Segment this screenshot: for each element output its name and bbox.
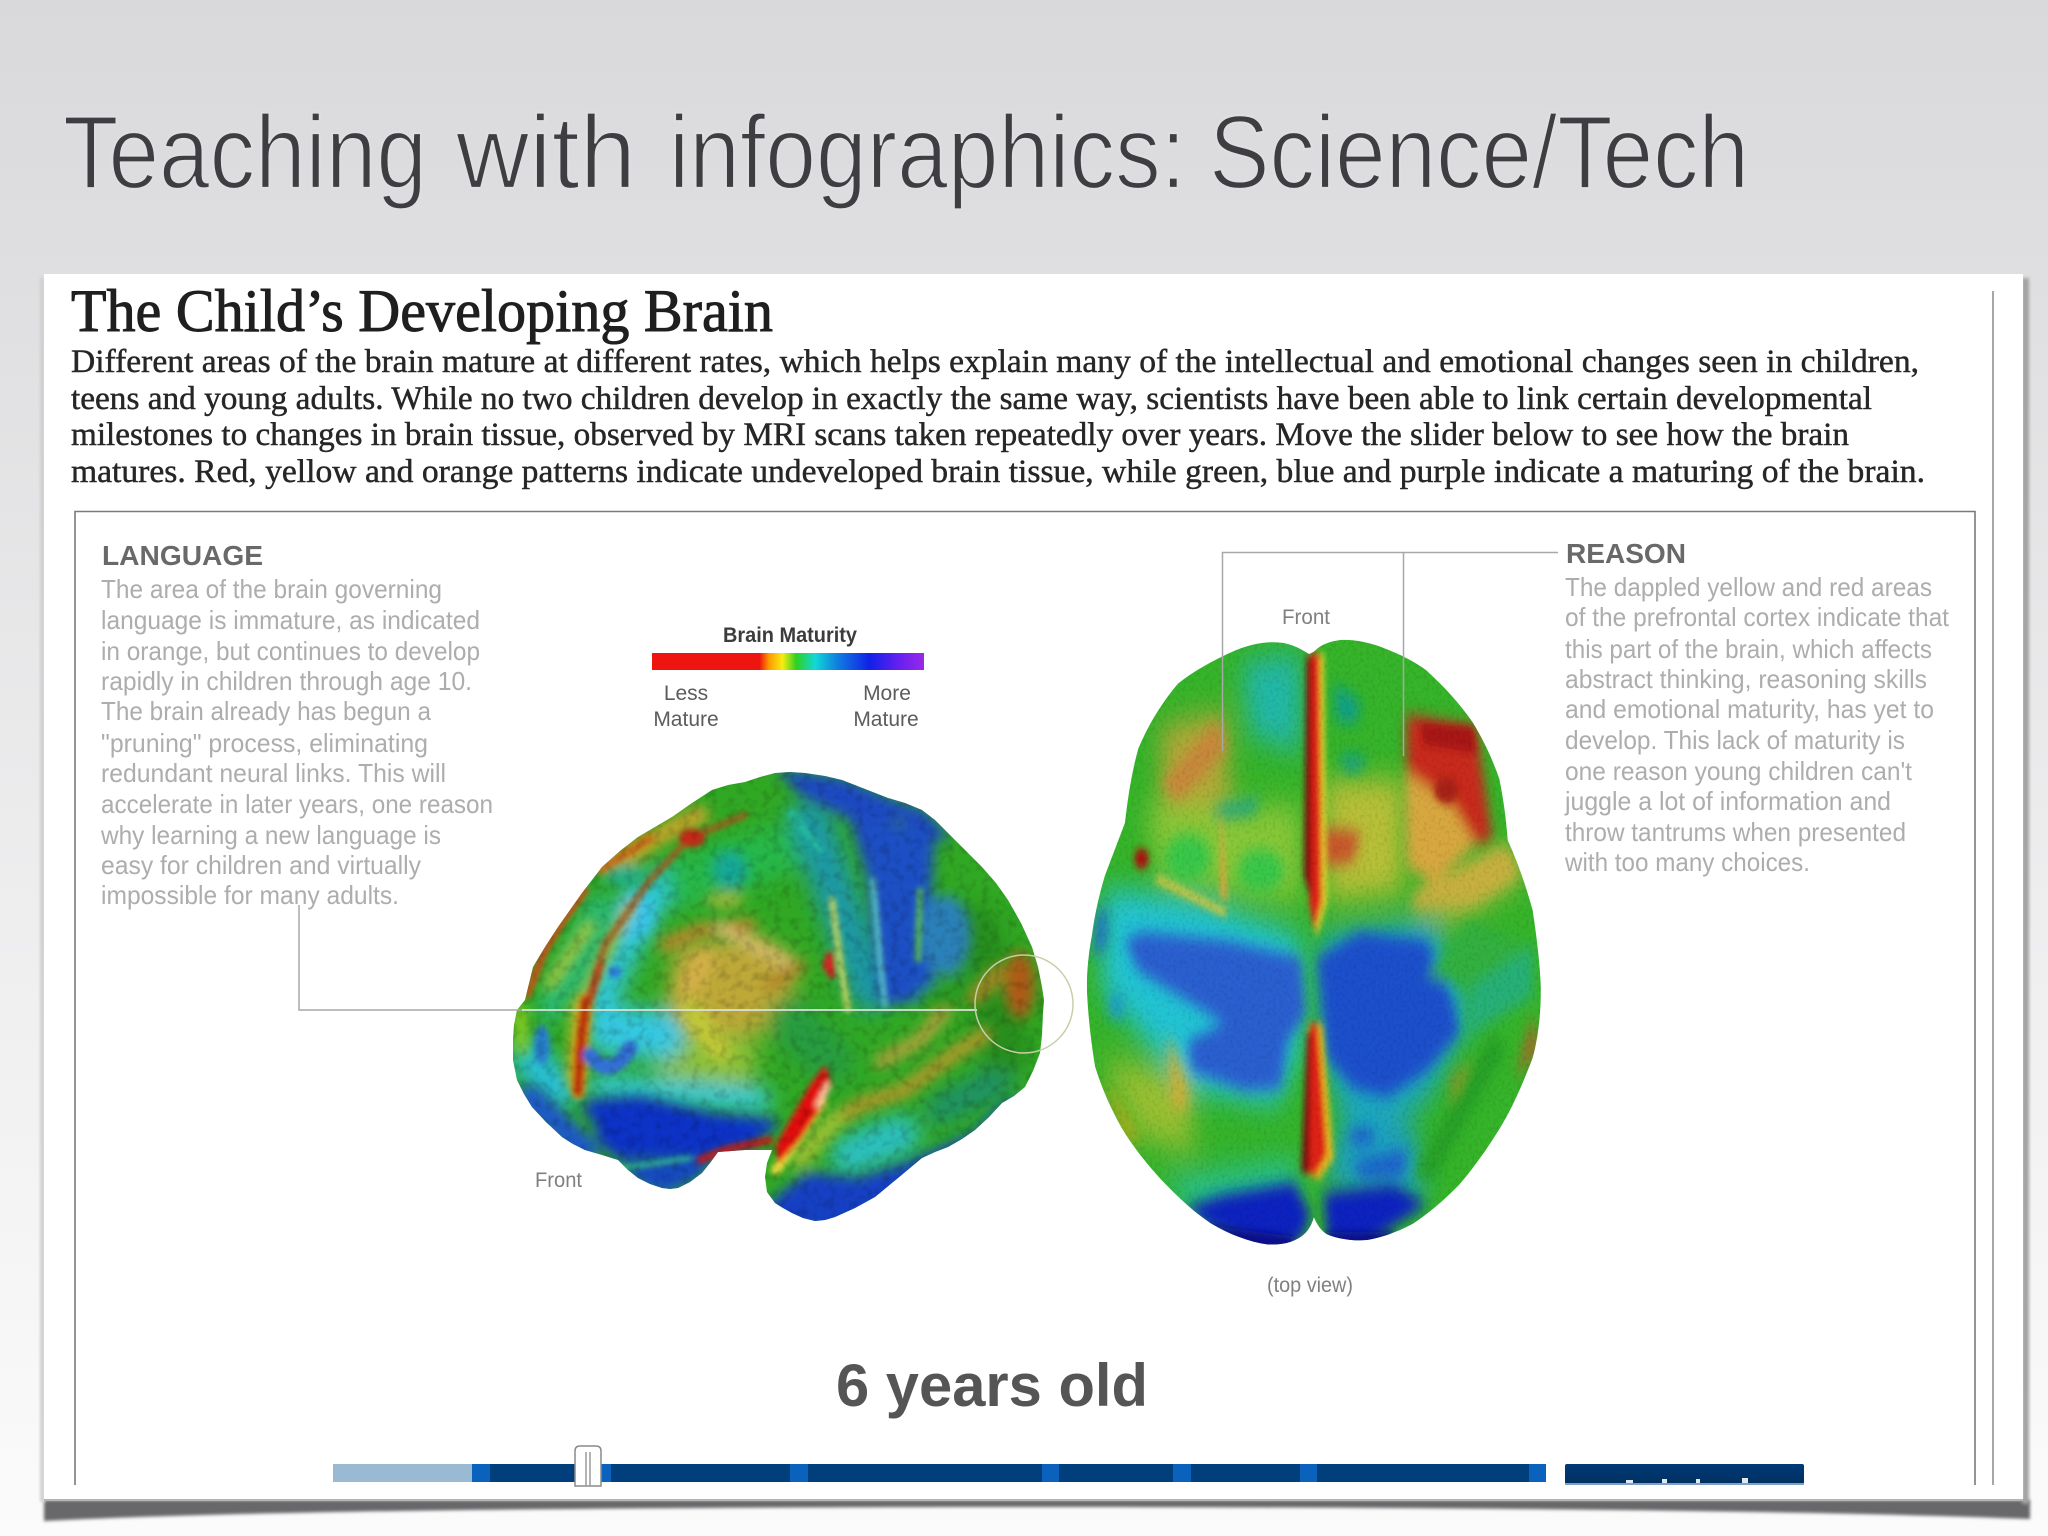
- language description: in orange, but continues to develop: [101, 636, 480, 666]
- reason description: and emotional maturity, has yet to: [1565, 694, 1934, 724]
- reason text block: [1564, 538, 1950, 877]
- legend label: less mature: Less: [664, 682, 708, 705]
- reason leader lines: [1222, 552, 1558, 756]
- intro paragraph: [71, 344, 1925, 490]
- language description: rapidly in children through age 10.: [101, 666, 472, 696]
- legend label: less mature: [653, 682, 719, 731]
- language text block: [100, 540, 493, 910]
- language description: redundant neural links. This will: [101, 758, 446, 788]
- age slider: [333, 1446, 1546, 1486]
- brain side view: [513, 772, 1044, 1221]
- legend title: Brain Maturity: [723, 624, 857, 647]
- panel shadow: [40, 278, 2030, 1521]
- language description: [100, 574, 493, 910]
- reason description: The dappled yellow and red areas: [1565, 572, 1932, 602]
- reason description: develop. This lack of maturity is: [1565, 725, 1905, 755]
- language description: accelerate in later years, one reason: [101, 789, 493, 819]
- reason description: one reason young children can't: [1565, 756, 1913, 786]
- language description: why learning a new language is: [100, 820, 441, 850]
- label: front (top view): Front: [1282, 606, 1330, 629]
- language description: The brain already has begun a: [101, 696, 431, 726]
- legend label: more mature: Mature: [853, 708, 919, 731]
- legend colour bar: [652, 653, 924, 670]
- legend label: more mature: [853, 682, 919, 731]
- reason description: juggle a lot of information and: [1564, 786, 1891, 816]
- button, cut off at panel edge: [1565, 1464, 1804, 1485]
- brain top view: [1075, 631, 1552, 1254]
- brain maturity legend: [652, 624, 924, 731]
- slide title: Teaching: [63, 95, 427, 211]
- legend label: more mature: More: [863, 682, 911, 705]
- slide title: infographics:: [669, 95, 1186, 211]
- label: top view: (top view): [1267, 1274, 1353, 1297]
- language heading: LANGUAGE: [102, 540, 263, 571]
- age readout: 6 years old: [836, 1352, 1148, 1419]
- language description: language is immature, as indicated: [101, 605, 480, 635]
- legend label: less mature: Mature: [653, 708, 719, 731]
- reason description: with too many choices.: [1564, 847, 1810, 877]
- reason description: throw tantrums when presented: [1565, 817, 1906, 847]
- reason description: [1564, 572, 1950, 877]
- language leader line and callout circle: [299, 905, 1073, 1053]
- intro paragraph: Different areas of the brain mature at different rates, which helps explain many of the intellectual and emotional changes seen in children,: [71, 344, 1919, 380]
- reason description: this part of the brain, which affects: [1565, 634, 1932, 664]
- language description: easy for children and virtually: [101, 850, 421, 880]
- reason heading: REASON: [1566, 538, 1686, 569]
- interactive frame: [75, 512, 1975, 1485]
- white infographic panel: [44, 274, 2023, 1501]
- intro paragraph: teens and young adults. While no two children develop in exactly the same way, scientists have been able to link certain developmental: [71, 381, 1872, 417]
- right page rule: [1992, 291, 1994, 1485]
- language description: impossible for many adults.: [101, 880, 399, 910]
- slider handle: [575, 1446, 601, 1486]
- intro paragraph: matures. Red, yellow and orange patterns indicate undeveloped brain tissue, while green, blue and purple indicate a maturing of the brain.: [71, 454, 1925, 490]
- language description: "pruning" process, eliminating: [101, 728, 428, 758]
- label: front (side view): Front: [535, 1169, 582, 1192]
- infographic heading: The Child’s Developing Brain: [71, 278, 773, 344]
- reason description: abstract thinking, reasoning skills: [1565, 664, 1927, 694]
- language description: The area of the brain governing: [101, 574, 442, 604]
- intro paragraph: milestones to changes in brain tissue, observed by MRI scans taken repeatedly over years. Move the slider below to see how the brain: [71, 417, 1849, 453]
- slide title: Science/Tech: [1209, 95, 1749, 211]
- reason description: of the prefrontal cortex indicate that: [1565, 602, 1950, 632]
- slide title: with: [455, 95, 636, 211]
